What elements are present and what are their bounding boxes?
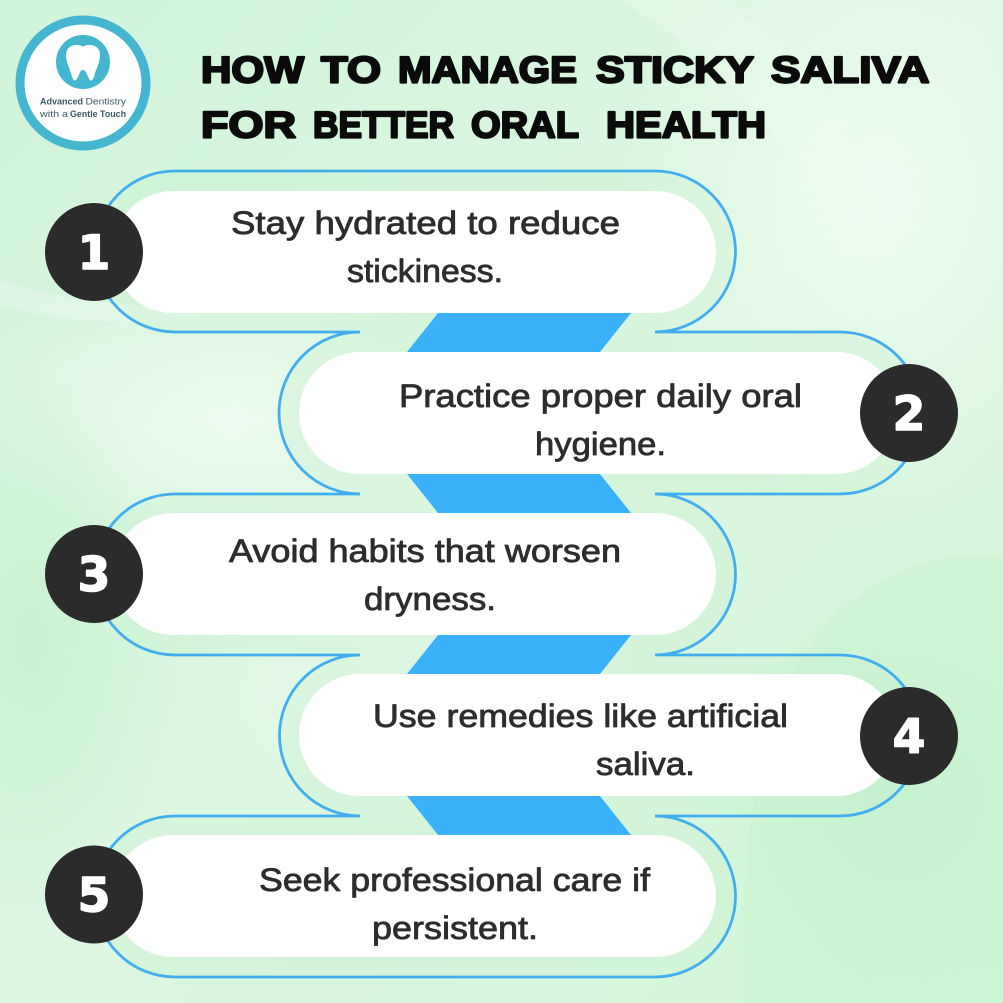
- pill 1: [112, 191, 716, 313]
- pill 5: [112, 835, 716, 957]
- text 4: Use remedies like artificial: [373, 698, 788, 734]
- logo: [20, 20, 146, 146]
- logo text: Gentle Touch: [70, 109, 126, 120]
- title: HOW: [201, 50, 304, 90]
- pill 2: [299, 352, 897, 474]
- step 1: [45, 191, 716, 313]
- text 3: [229, 533, 621, 617]
- text 2: Practice proper daily oral: [399, 378, 802, 414]
- number badge 5: 5: [78, 868, 110, 924]
- text 5: [259, 862, 650, 946]
- step 4: [299, 674, 958, 796]
- title: BETTER: [313, 104, 454, 146]
- pill 4: [299, 674, 897, 796]
- text 1: [231, 205, 620, 289]
- number badge 4: 4: [893, 710, 925, 765]
- text 5: persistent.: [372, 910, 538, 946]
- text 4: [373, 698, 788, 782]
- number badge 2: [860, 364, 958, 462]
- title: [201, 50, 930, 146]
- step 2: [299, 352, 958, 474]
- text 1: stickiness.: [347, 253, 503, 289]
- number badge 5: [45, 846, 143, 944]
- blue connectors between steps: [407, 313, 631, 835]
- number badge 1: 1: [78, 226, 110, 281]
- text 2: hygiene.: [535, 426, 666, 462]
- title: MANAGE: [398, 50, 577, 90]
- title: FOR: [201, 104, 296, 146]
- step 3: [45, 513, 716, 635]
- number badge 1: [45, 203, 143, 301]
- text 4: saliva.: [596, 746, 695, 782]
- logo text: [39, 96, 126, 120]
- text 1: Stay hydrated to reduce: [231, 205, 620, 241]
- title: HEALTH: [606, 104, 766, 146]
- connector outline with tinted band: [94, 171, 921, 977]
- logo text: Dentistry: [86, 96, 126, 108]
- text 3: Avoid habits that worsen: [229, 533, 621, 569]
- title: ORAL: [471, 104, 579, 146]
- text 2: [399, 378, 802, 462]
- number badge 3: 3: [78, 548, 110, 603]
- pill 3: [112, 513, 716, 635]
- title: TO: [321, 50, 381, 90]
- number badge 3: [45, 525, 143, 623]
- icon: tooth: [66, 45, 100, 80]
- number badge 4: [860, 687, 958, 785]
- step 5: [45, 835, 716, 957]
- text 3: dryness.: [364, 581, 496, 617]
- number badge 2: 2: [893, 387, 925, 442]
- logo text: with a: [39, 109, 69, 120]
- logo text: Advanced: [40, 96, 83, 108]
- title: STICKY: [596, 50, 754, 90]
- text 5: Seek professional care if: [259, 862, 650, 898]
- title: SALIVA: [771, 50, 930, 90]
